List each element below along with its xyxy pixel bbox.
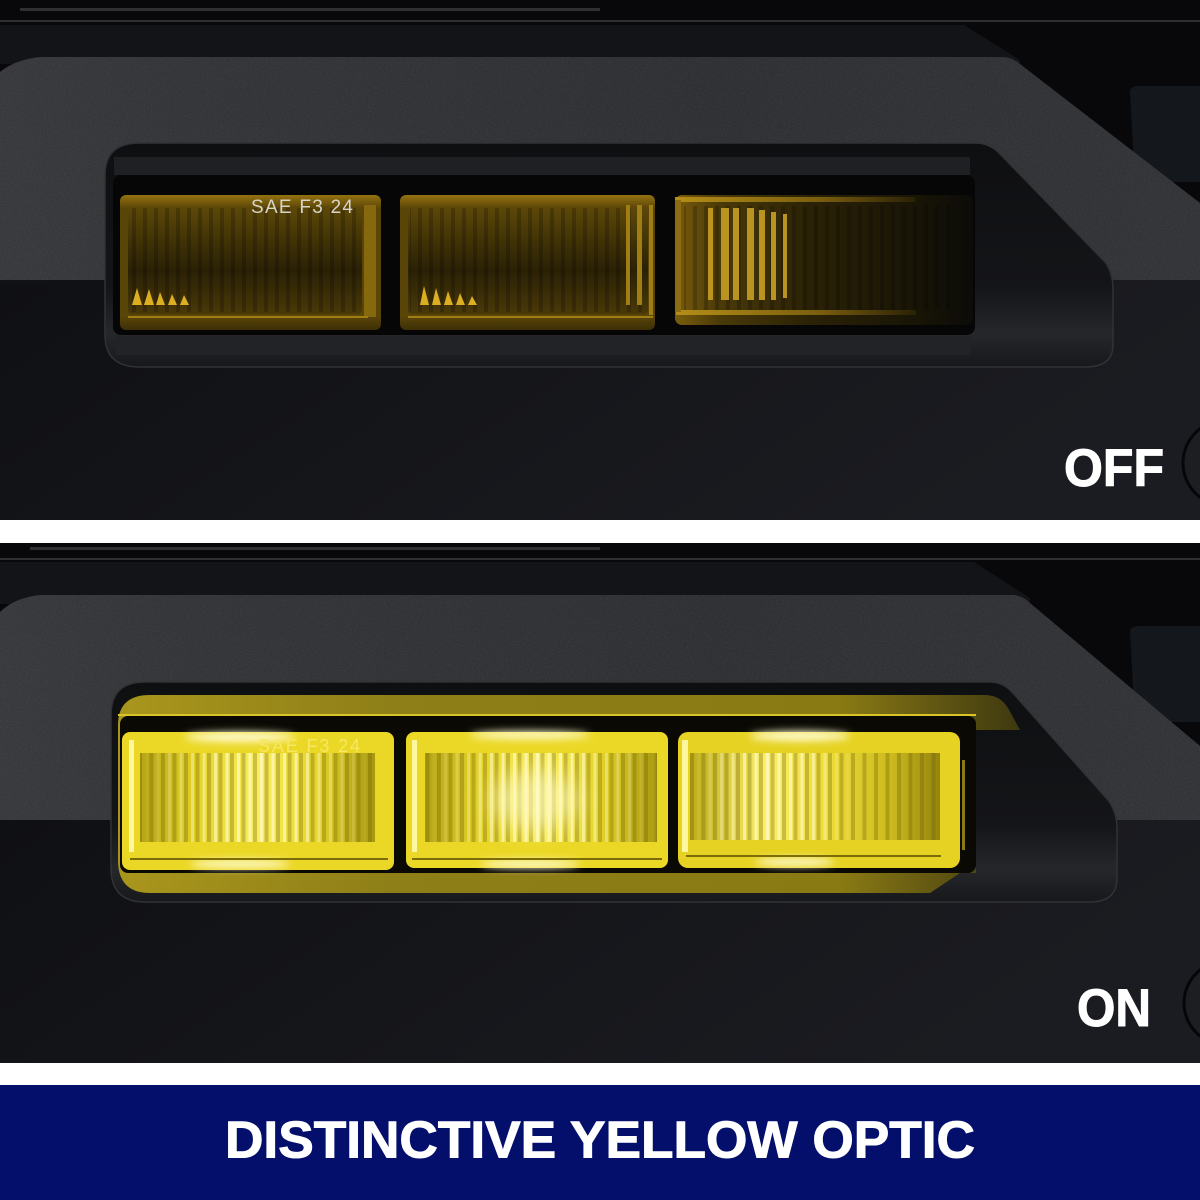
lens: left (120, 195, 381, 330)
label: on: ON (1077, 979, 1151, 1038)
banner (0, 1085, 1200, 1200)
switch knob (1184, 961, 1200, 1045)
bumper trim (0, 595, 1200, 820)
glowing bezel (118, 695, 1020, 893)
label: off: OFF (1064, 439, 1164, 498)
lens: left (122, 732, 394, 870)
panel: lamp on (0, 543, 1200, 1063)
bumper trim (0, 57, 1200, 280)
lens: middle (406, 731, 668, 868)
lamp recess (105, 143, 1113, 367)
lens: right (675, 195, 973, 325)
lens: right (678, 731, 965, 868)
lens marking: SAE F3 24 (251, 197, 353, 218)
lens: middle (400, 195, 655, 330)
switch knob (1183, 420, 1200, 506)
lens marking: SAE F3 24 (258, 736, 360, 756)
panel: lamp off (0, 0, 1200, 520)
lamp recess (111, 682, 1117, 902)
banner title: DISTINCTIVE YELLOW OPTIC (225, 1112, 975, 1170)
